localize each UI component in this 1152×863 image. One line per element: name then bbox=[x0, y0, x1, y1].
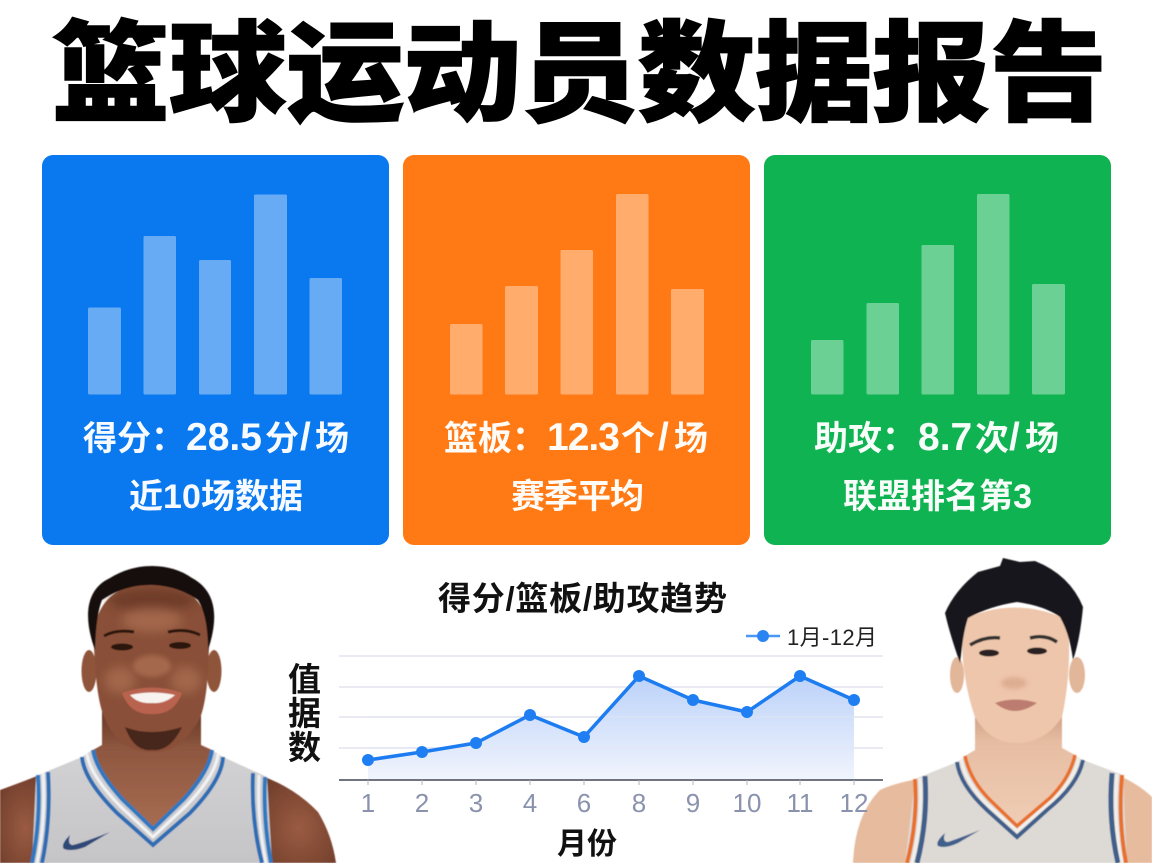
y axis label: 据 bbox=[288, 695, 321, 732]
neck bbox=[93, 705, 212, 829]
area fill bbox=[368, 676, 854, 779]
jersey trim bbox=[82, 757, 223, 845]
mouth bbox=[995, 700, 1037, 711]
legend bbox=[746, 625, 877, 650]
eyes bbox=[979, 650, 999, 656]
x tick labels: 1 bbox=[361, 788, 375, 818]
chart title: 得分/篮板/助攻趋势 bbox=[438, 580, 727, 617]
bar chart: rebounds bbox=[450, 194, 704, 394]
player photo: left bbox=[0, 566, 336, 863]
y axis label bbox=[288, 661, 321, 766]
stat: assists: 8.7 bbox=[918, 416, 972, 459]
head bbox=[94, 583, 209, 752]
jersey trim bbox=[957, 760, 1083, 837]
beard bbox=[125, 727, 182, 750]
stat: rebounds: 个 bbox=[621, 420, 655, 458]
brows bbox=[104, 631, 134, 636]
x axis bbox=[339, 780, 883, 785]
forehead shade bbox=[108, 588, 196, 612]
panel: points bbox=[42, 155, 389, 545]
ears bbox=[82, 650, 96, 692]
x tick labels: 11 bbox=[786, 788, 814, 818]
line chart bbox=[339, 656, 883, 818]
x tick labels bbox=[361, 788, 868, 818]
x tick labels: 6 bbox=[577, 788, 591, 818]
stat: assists: 助攻： bbox=[814, 420, 916, 458]
stat: rebounds: / bbox=[658, 416, 669, 459]
x tick labels: 12 bbox=[840, 788, 868, 818]
x tick labels: 3 bbox=[469, 788, 483, 818]
panel: assists bbox=[764, 155, 1111, 545]
stat: rebounds: 篮板： bbox=[444, 420, 546, 458]
head bbox=[962, 608, 1069, 743]
stat: points: 28.5 bbox=[186, 416, 262, 459]
brows bbox=[970, 638, 1000, 645]
stat: rebounds: 12.3 bbox=[547, 416, 619, 459]
bar chart: assists bbox=[811, 194, 1065, 394]
ears bbox=[950, 657, 964, 693]
legend: 1月-12月 bbox=[787, 625, 877, 650]
jersey bbox=[32, 749, 272, 863]
note: points: 近10场数据 bbox=[129, 478, 303, 516]
x tick labels: 9 bbox=[686, 788, 700, 818]
x tick labels: 4 bbox=[523, 788, 537, 818]
logo bbox=[63, 832, 110, 850]
eyes bbox=[111, 644, 133, 650]
stat: assists: 场 bbox=[1025, 420, 1059, 458]
logo bbox=[937, 830, 980, 847]
x axis label: 月份 bbox=[557, 828, 617, 861]
neck bbox=[965, 705, 1075, 826]
cheek highlights bbox=[105, 608, 201, 693]
stat: points: 分 bbox=[265, 420, 299, 458]
x tick labels: 8 bbox=[632, 788, 646, 818]
stat: points: / bbox=[300, 416, 311, 459]
data line bbox=[368, 676, 854, 760]
stat: assists: / bbox=[1009, 416, 1020, 459]
hair bbox=[945, 558, 1083, 663]
data points bbox=[362, 670, 860, 766]
player photo: right bbox=[853, 558, 1152, 863]
nose bbox=[133, 655, 171, 677]
mouth bbox=[122, 688, 182, 714]
hair bbox=[88, 566, 214, 650]
jersey bbox=[905, 755, 1127, 863]
stat: assists: 次 bbox=[975, 420, 1009, 458]
arms bbox=[853, 779, 918, 863]
stat: points: 场 bbox=[315, 420, 349, 458]
note: assists: 联盟排名第3 bbox=[843, 478, 1032, 516]
x tick labels: 10 bbox=[733, 788, 761, 818]
stat: rebounds: 场 bbox=[674, 420, 708, 458]
bar chart: points bbox=[88, 194, 342, 394]
y axis label: 数 bbox=[288, 729, 321, 766]
y axis label: 值 bbox=[288, 661, 321, 698]
x tick labels: 2 bbox=[415, 788, 429, 818]
stat: points: 得分： bbox=[83, 420, 185, 458]
note: rebounds: 赛季平均 bbox=[511, 478, 644, 516]
panel: rebounds bbox=[403, 155, 750, 545]
nose bbox=[1001, 677, 1027, 689]
arms bbox=[0, 776, 50, 863]
